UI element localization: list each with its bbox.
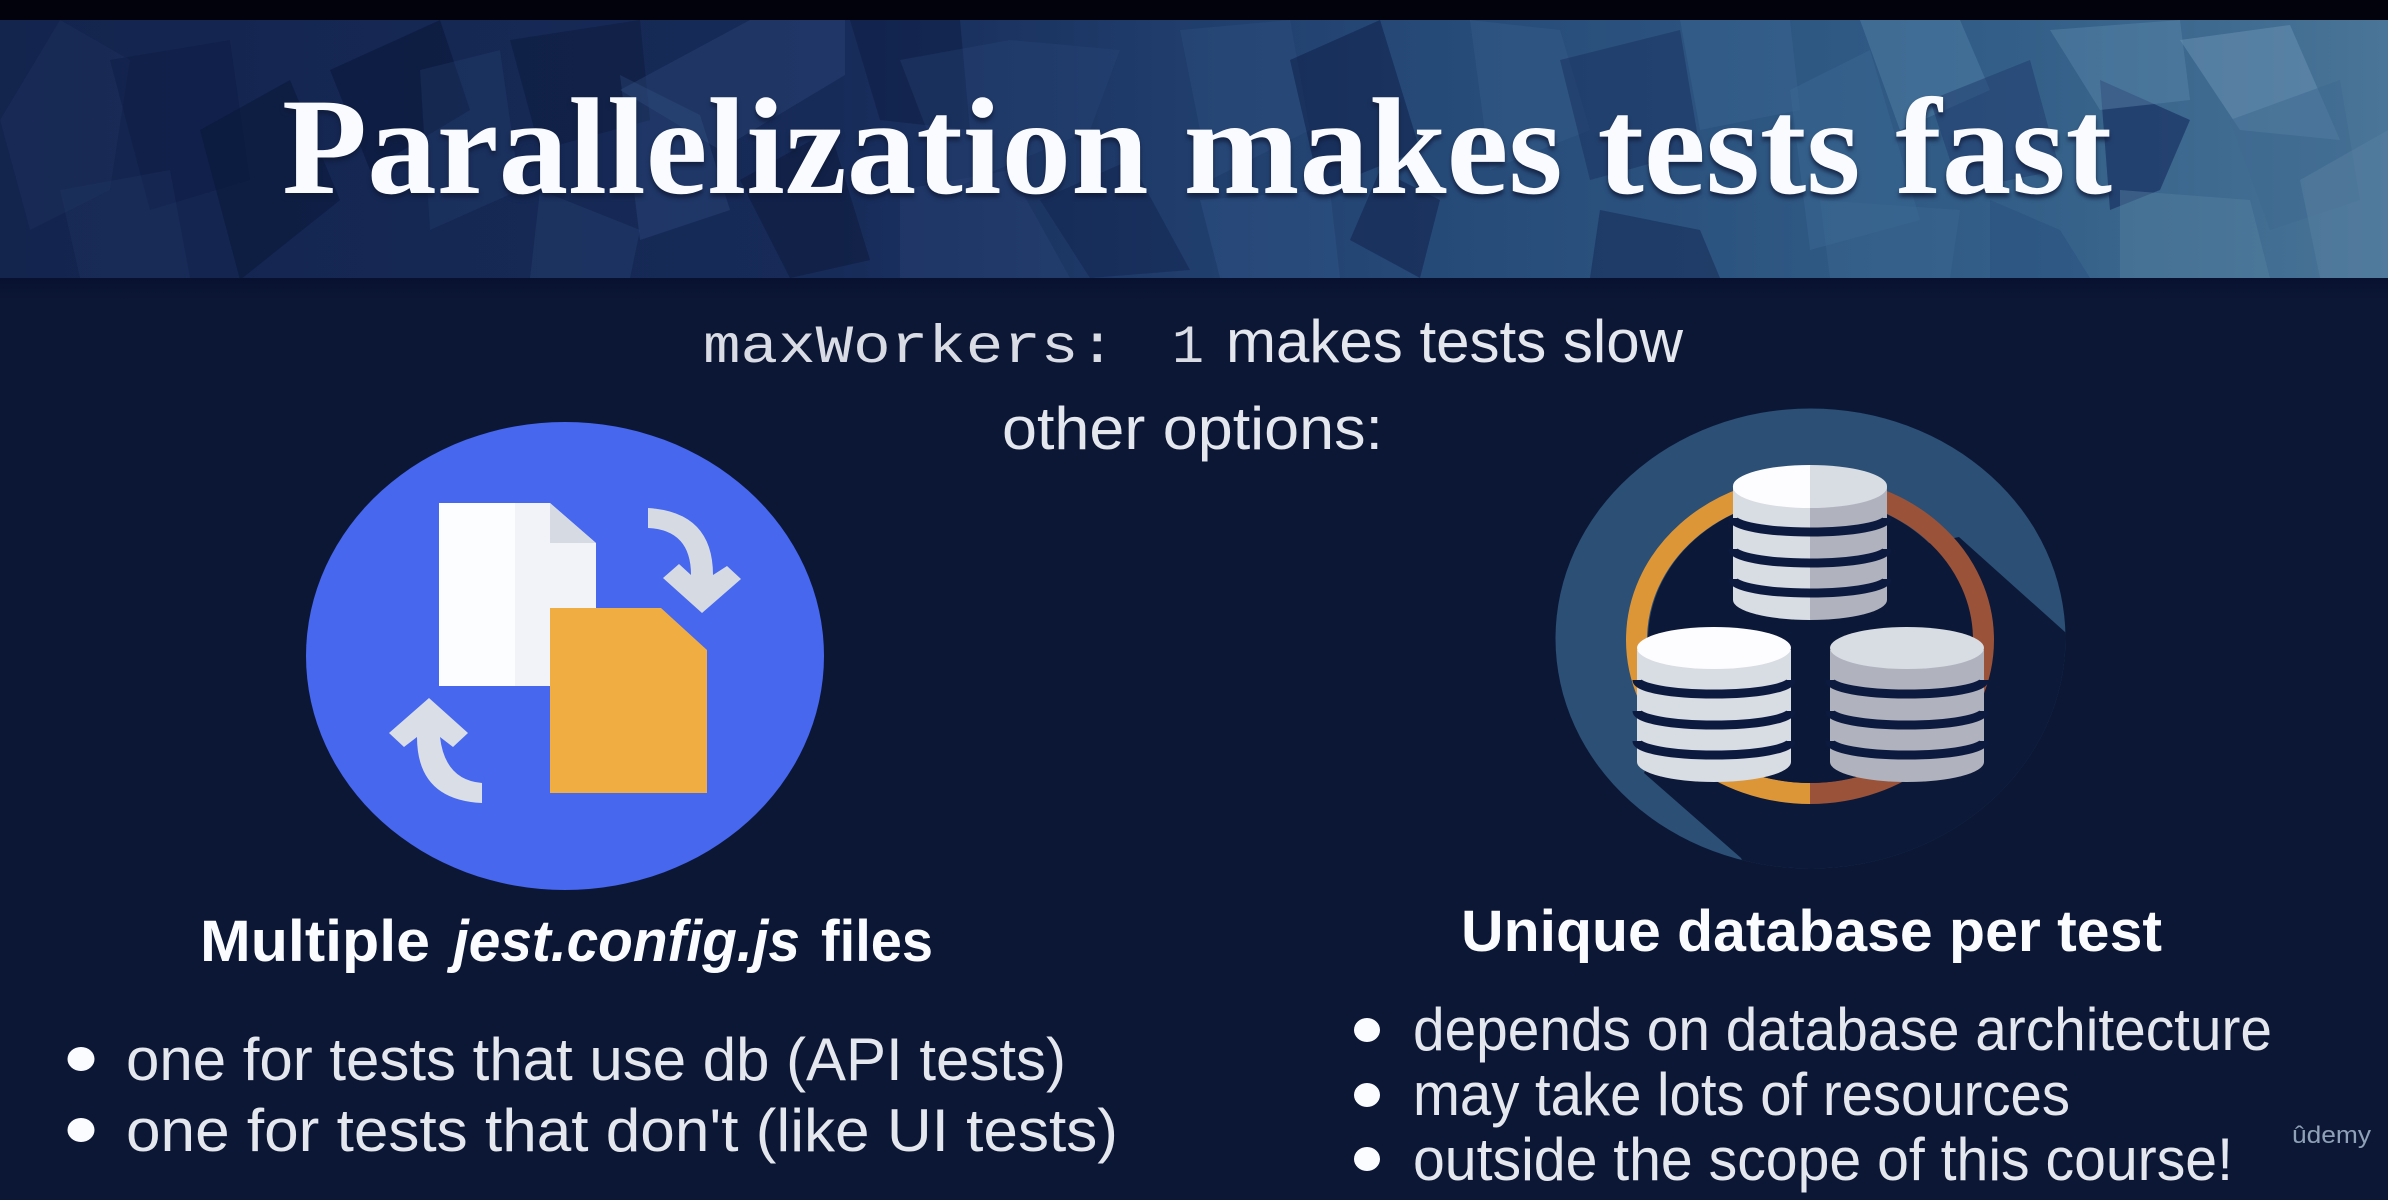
teal circle [1556,408,2066,868]
title: Parallelization makes tests fast [282,70,2112,223]
white document [439,503,596,686]
long shadow [1644,537,2066,868]
icon: files swap [306,422,824,890]
header banner [0,20,2388,280]
bullet list: config files: one for tests that use db (API tests) [126,1026,1066,1093]
udemy watermark: ûdemy [2292,1122,2371,1149]
heading: multiple config files: Multiple [200,909,430,974]
top black bar [0,0,2388,20]
arrow top right [648,508,741,613]
database top [1733,465,1887,620]
heading: multiple config files [200,909,933,974]
bullet list: config files: one for tests that don't (like UI tests) [126,1097,1118,1164]
ring [1636,486,1984,794]
heading: multiple config files: jest.config.js [446,909,800,974]
heading: multiple config files: files [821,909,933,974]
heading: unique database: Unique database per test [1461,899,2162,964]
bullet list: unique database: outside the scope of this course! [1413,1126,2233,1193]
subtitle line: maxWorkers [703,308,1684,379]
bullet list: unique database: may take lots of resources [1413,1061,2070,1128]
subtitle line: maxWorkers: makes tests slow [1226,308,1684,375]
header bottom shadow [0,278,2388,300]
blue circle [306,422,824,890]
arrow bottom left [389,698,482,803]
subtitle line: maxWorkers: 1 [1172,318,1204,379]
bullet list: unique database [1354,996,2272,1193]
bullet list: unique database: depends on database architecture [1413,996,2272,1063]
subtitle line: maxWorkers: maxWorkers: [703,318,1116,379]
icon: three databases [1556,408,2066,868]
bullet list: config files [68,1026,1118,1164]
orange document [550,608,707,793]
database right [1830,627,1984,782]
other options label: other options: [1002,395,1383,462]
database left [1637,627,1791,782]
